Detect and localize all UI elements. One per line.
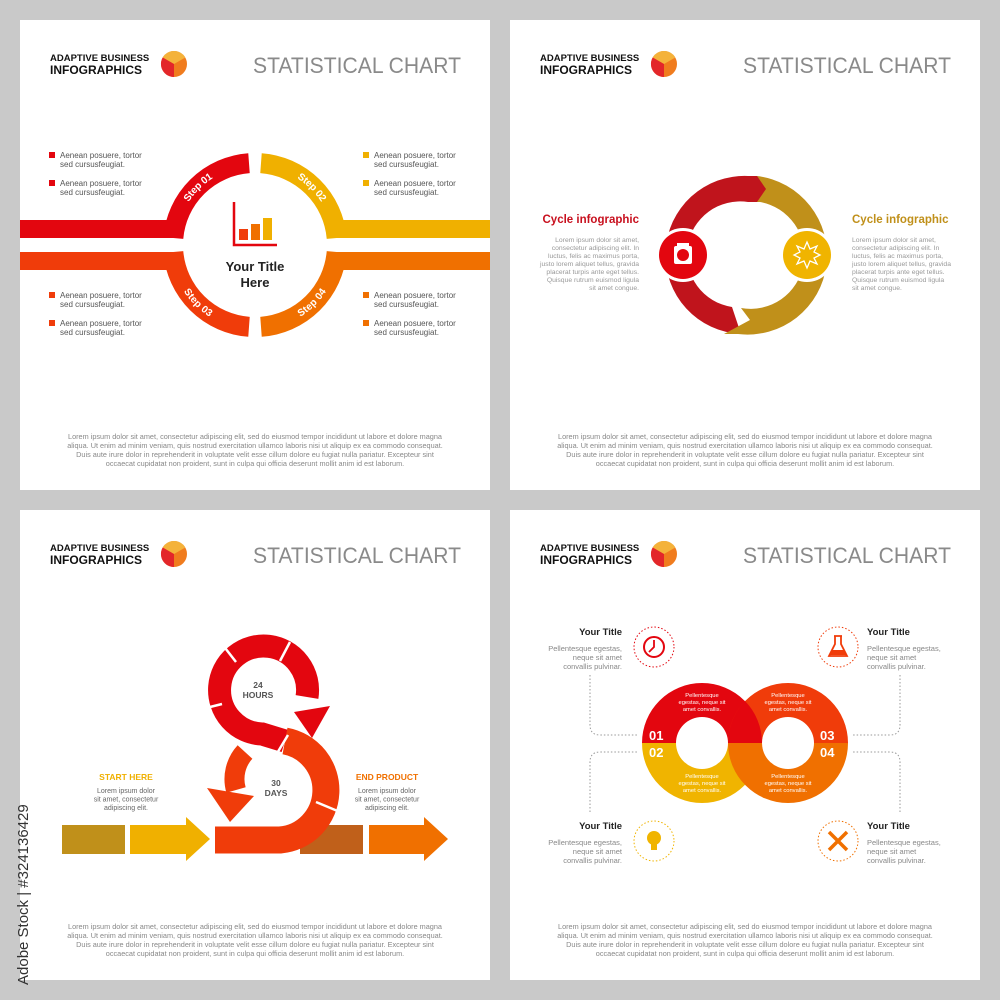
header — [540, 51, 951, 78]
header: ADAPTIVE BUSINESS — [540, 543, 639, 554]
start text: adipiscing elit. — [104, 805, 148, 812]
bullets: sed cursusfeugiat. — [60, 188, 125, 197]
panel: cycle — [510, 20, 980, 490]
rings: Pellentesque — [771, 774, 805, 780]
panel: step circle: Step 03 — [184, 288, 212, 316]
text: left cycle: placerat turpis ante eget tellus. — [546, 269, 639, 276]
text: bottom-right: convallis pulvinar. — [867, 856, 926, 865]
end text: sit amet, consectetur — [355, 796, 420, 804]
bullets: sed cursusfeugiat. — [60, 160, 125, 169]
text: left cycle — [539, 214, 640, 292]
start text: sit amet, consectetur — [94, 796, 159, 804]
icon: tools — [818, 821, 858, 861]
title text: Your Title — [226, 259, 284, 274]
icon: safe — [656, 228, 710, 282]
rings: 01 — [649, 728, 663, 743]
header: STATISTICAL CHART — [253, 543, 461, 568]
labels center: 24 — [253, 680, 263, 690]
rings: egestas, neque sit — [764, 700, 812, 706]
bullets: sed cursusfeugiat. — [374, 160, 439, 169]
header: INFOGRAPHICS — [540, 553, 632, 567]
header — [50, 541, 461, 568]
icon: bar chart — [234, 202, 277, 245]
text: bottom-left: convallis pulvinar. — [563, 856, 622, 865]
bullets: sed cursusfeugiat. — [374, 188, 439, 197]
rings: amet convallis. — [683, 788, 722, 794]
text: right cycle: Quisque rutrum euismod ligula — [852, 277, 944, 284]
footer text: Duis aute irure dolor in reprehenderit in voluptate velit esse cillum dolore eu fugiat nulla pariatur. Excepteur sint — [76, 940, 434, 949]
rings: egestas, neque sit — [764, 781, 812, 787]
cycle ring — [665, 176, 827, 335]
bullets: Aenean posuere, tortor — [60, 291, 142, 300]
footer text: Lorem ipsum dolor sit amet, consectetur adipiscing elit, sed do eiusmod tempor incididunt ut labore et dolore magna — [558, 432, 932, 441]
panel: step circle: Step 02 — [298, 173, 326, 202]
text: right cycle — [851, 214, 951, 292]
header: ADAPTIVE BUSINESS — [50, 53, 149, 64]
footer text: aliqua. Ut enim ad minim veniam, quis nostrud exercitation ullamco laboris nisi ut aliquip ex ea commodo consequat. — [67, 931, 443, 940]
text: left cycle: Cycle infographic — [542, 214, 640, 226]
bullets: Aenean posuere, tortor — [60, 319, 142, 328]
arrows bottom — [62, 817, 448, 861]
icon: clock — [634, 627, 674, 667]
ring steps — [173, 163, 337, 327]
footer text: Duis aute irure dolor in reprehenderit in voluptate velit esse cillum dolore eu fugiat nulla pariatur. Excepteur sint — [566, 450, 924, 459]
header: ADAPTIVE BUSINESS — [540, 53, 639, 64]
rings: Pellentesque — [771, 693, 805, 699]
footer text: Duis aute irure dolor in reprehenderit in voluptate velit esse cillum dolore eu fugiat nulla pariatur. Excepteur sint — [76, 450, 434, 459]
start text: START HERE — [99, 772, 153, 782]
panel: step circle: Step 01 — [184, 173, 213, 201]
panel: S process — [20, 510, 490, 980]
header: ADAPTIVE BUSINESS — [50, 543, 149, 554]
text: right cycle: Lorem ipsum dolor sit amet, — [852, 237, 936, 244]
end text — [355, 772, 420, 812]
footer text: occaecat cupidatat non proident, sunt in culpa qui officia deserunt mollit anim id est laborum. — [596, 949, 894, 958]
bullets: sed cursusfeugiat. — [60, 300, 125, 309]
text: left cycle: sit amet congue. — [589, 285, 639, 292]
footer text: Duis aute irure dolor in reprehenderit in voluptate velit esse cillum dolore eu fugiat nulla pariatur. Excepteur sint — [566, 940, 924, 949]
end text: adipiscing elit. — [365, 805, 409, 812]
text: top-right: convallis pulvinar. — [867, 662, 926, 671]
text: top-right: neque sit amet — [867, 653, 917, 662]
footer text: occaecat cupidatat non proident, sunt in culpa qui officia deserunt mollit anim id est laborum. — [106, 459, 404, 468]
rings: 04 — [820, 745, 835, 760]
text: bottom-left: neque sit amet — [573, 847, 623, 856]
S shape — [198, 642, 340, 840]
text: bottom-left: Pellentesque egestas, — [548, 838, 622, 847]
header: INFOGRAPHICS — [50, 553, 142, 567]
rings: egestas, neque sit — [678, 781, 726, 787]
footer text: aliqua. Ut enim ad minim veniam, quis nostrud exercitation ullamco laboris nisi ut aliquip ex ea commodo consequat. — [557, 931, 933, 940]
text: top-right: Your Title — [867, 627, 910, 638]
bullets: Aenean posuere, tortor — [374, 151, 456, 160]
header: STATISTICAL CHART — [253, 53, 461, 78]
text: left cycle: Lorem ipsum dolor sit amet, — [555, 237, 639, 244]
text: left cycle: luctus, felis ac maximus porta, — [548, 253, 639, 260]
rings: amet convallis. — [769, 788, 808, 794]
rings: Pellentesque — [685, 693, 719, 699]
panel: step circle — [20, 20, 490, 490]
end text: END PRODUCT — [356, 772, 419, 782]
text: bottom-left: Your Title — [579, 821, 622, 832]
footer text: occaecat cupidatat non proident, sunt in culpa qui officia deserunt mollit anim id est laborum. — [596, 459, 894, 468]
text: top-left: Your Title — [579, 627, 622, 638]
text: top-left: convallis pulvinar. — [563, 662, 622, 671]
text: bottom-right — [867, 821, 941, 865]
text: right cycle: sit amet congue. — [852, 285, 902, 292]
rings — [642, 683, 848, 803]
text: top-right — [867, 627, 941, 671]
text: right cycle: placerat turpis ante eget tellus. — [852, 269, 945, 276]
bullets — [49, 151, 456, 337]
start text: Lorem ipsum dolor — [97, 788, 155, 795]
text: top-left: neque sit amet — [573, 653, 623, 662]
icon: star — [780, 228, 834, 282]
rings: 02 — [649, 745, 663, 760]
title text: Here — [241, 275, 269, 290]
bullets: Aenean posuere, tortor — [374, 291, 456, 300]
text: top-left — [548, 627, 623, 671]
text: bottom-left — [548, 821, 623, 865]
header: STATISTICAL CHART — [743, 543, 951, 568]
rings: Pellentesque — [685, 774, 719, 780]
header: INFOGRAPHICS — [540, 63, 632, 77]
text: bottom-right: Pellentesque egestas, — [867, 838, 941, 847]
text: left cycle: justo lorem aliquet tellus, gravida — [539, 261, 639, 268]
text: right cycle: consectetur adipiscing elit. In — [852, 245, 939, 252]
bullets: sed cursusfeugiat. — [374, 328, 439, 337]
text: left cycle: Quisque rutrum euismod ligula — [547, 277, 639, 284]
bars — [20, 220, 490, 270]
labels center — [243, 680, 288, 798]
text: right cycle: luctus, felis ac maximus porta, — [852, 253, 943, 260]
header — [540, 541, 951, 568]
header — [50, 51, 461, 78]
labels center: 30 — [271, 778, 281, 788]
panel: step circle: Step 04 — [298, 288, 326, 316]
watermark id text: Adobe Stock | #324136429 — [15, 804, 32, 985]
bullets: sed cursusfeugiat. — [60, 328, 125, 337]
bullets: Aenean posuere, tortor — [60, 151, 142, 160]
labels center: DAYS — [265, 788, 288, 798]
labels center: HOURS — [243, 690, 274, 700]
start text — [94, 772, 159, 812]
icon: flask — [818, 627, 858, 667]
text: top-left: Pellentesque egestas, — [548, 644, 622, 653]
icon: bulb — [634, 821, 674, 861]
footer text: aliqua. Ut enim ad minim veniam, quis nostrud exercitation ullamco laboris nisi ut aliquip ex ea commodo consequat. — [67, 441, 443, 450]
header: STATISTICAL CHART — [743, 53, 951, 78]
header: INFOGRAPHICS — [50, 63, 142, 77]
text: right cycle: Cycle infographic — [852, 214, 949, 226]
end text: Lorem ipsum dolor — [358, 788, 416, 795]
text: bottom-right: Your Title — [867, 821, 910, 832]
panel: infinity rings — [510, 510, 980, 980]
footer text: Lorem ipsum dolor sit amet, consectetur adipiscing elit, sed do eiusmod tempor incididunt ut labore et dolore magna — [558, 922, 932, 931]
bullets: Aenean posuere, tortor — [374, 179, 456, 188]
text: bottom-right: neque sit amet — [867, 847, 917, 856]
bullets: sed cursusfeugiat. — [374, 300, 439, 309]
footer text: Lorem ipsum dolor sit amet, consectetur adipiscing elit, sed do eiusmod tempor incididunt ut labore et dolore magna — [68, 922, 442, 931]
footer text: occaecat cupidatat non proident, sunt in culpa qui officia deserunt mollit anim id est laborum. — [106, 949, 404, 958]
footer text: Lorem ipsum dolor sit amet, consectetur adipiscing elit, sed do eiusmod tempor incididunt ut labore et dolore magna — [68, 432, 442, 441]
connectors — [590, 675, 900, 812]
rings: 03 — [820, 728, 834, 743]
bullets: Aenean posuere, tortor — [60, 179, 142, 188]
text: top-right: Pellentesque egestas, — [867, 644, 941, 653]
bullets: Aenean posuere, tortor — [374, 319, 456, 328]
rings: amet convallis. — [683, 707, 722, 713]
footer text: aliqua. Ut enim ad minim veniam, quis nostrud exercitation ullamco laboris nisi ut aliquip ex ea commodo consequat. — [557, 441, 933, 450]
rings: egestas, neque sit — [678, 700, 726, 706]
text: left cycle: consectetur adipiscing elit. In — [552, 245, 639, 252]
text: right cycle: justo lorem aliquet tellus, gravida — [851, 261, 951, 268]
rings: amet convallis. — [769, 707, 808, 713]
